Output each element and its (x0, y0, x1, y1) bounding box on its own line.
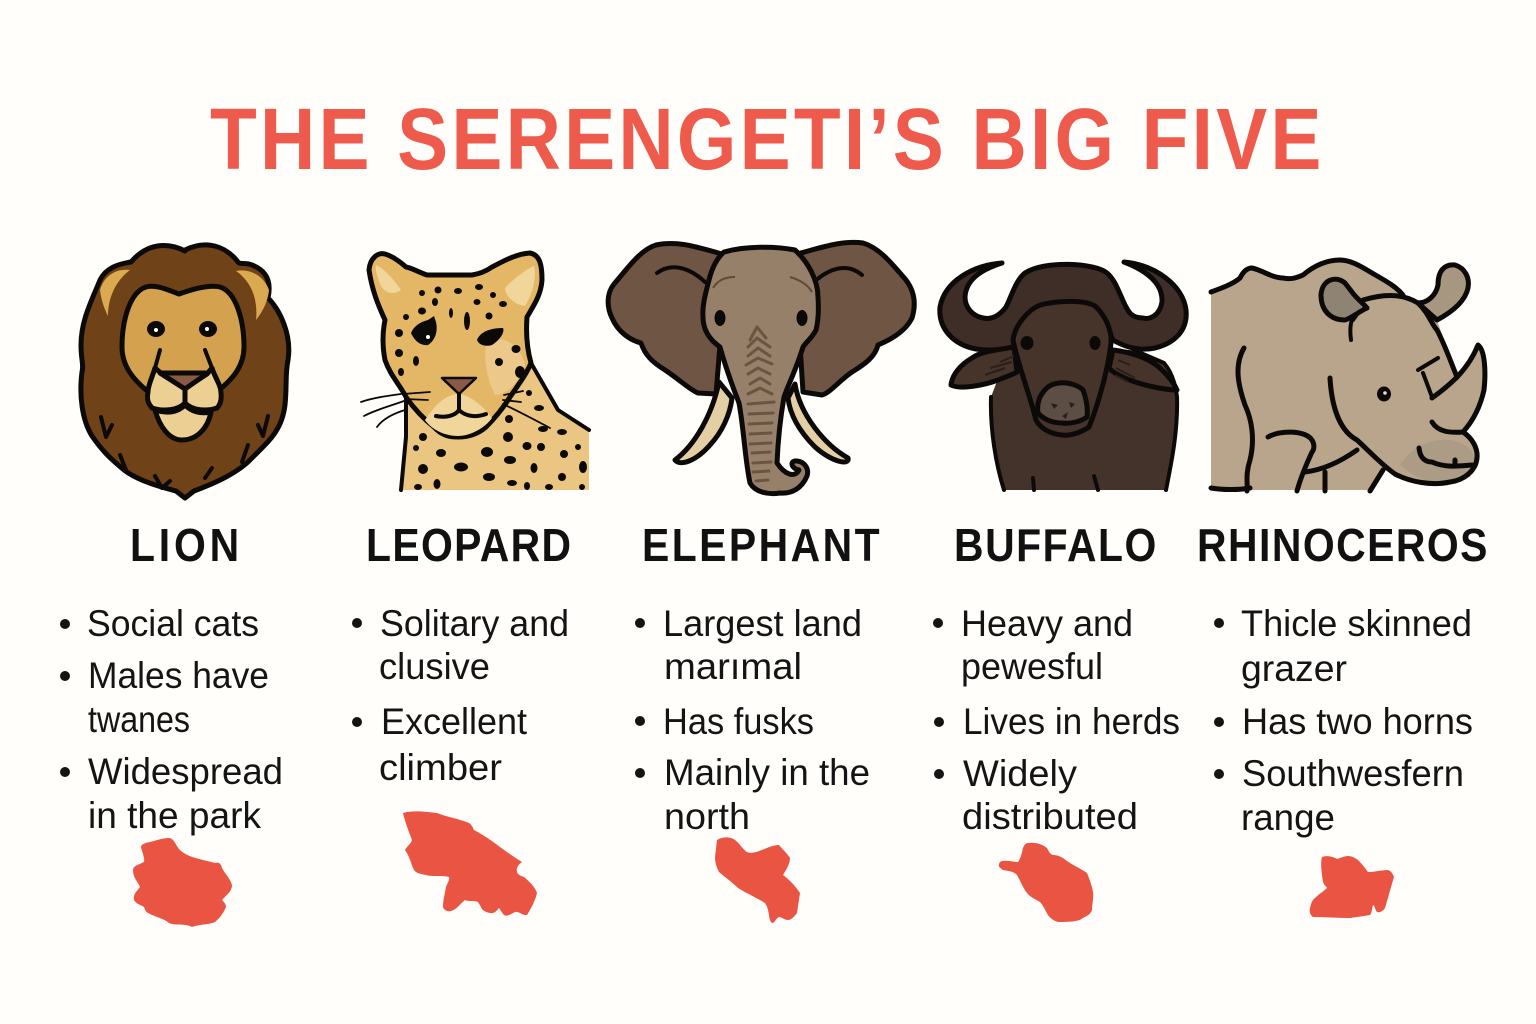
facts: leopard: Excellent (381, 701, 528, 742)
range map: rhinoceros (1310, 856, 1394, 918)
title: THE SERENGETI’S BIG FIVE (210, 91, 1321, 188)
facts: leopard: climber (379, 747, 502, 788)
facts: lion: twanes (88, 699, 190, 740)
facts: lion (60, 603, 283, 836)
facts: elephant: Largest land (663, 603, 862, 644)
icon: rhinoceros (1211, 260, 1485, 491)
facts: lion: Males have (88, 655, 269, 696)
facts: rhinoceros: Thicle skinned (1241, 603, 1472, 644)
heading: buffalo: BUFFALO (954, 520, 1156, 572)
range map: leopard (403, 811, 537, 916)
facts: elephant: north (664, 796, 750, 837)
facts: elephant: Mainly in the (664, 752, 870, 793)
facts: rhinoceros: Southwesfern (1242, 753, 1464, 794)
panel: buffalo (933, 262, 1186, 922)
facts: lion: Social cats (87, 603, 259, 644)
icon: buffalo (940, 262, 1186, 490)
facts: buffalo (933, 603, 1180, 837)
facts: buffalo: pewesful (961, 646, 1103, 687)
range map: elephant (715, 837, 800, 923)
panel: rhinoceros (1197, 260, 1487, 918)
facts: buffalo: Heavy and (961, 603, 1133, 644)
panel: lion (60, 245, 289, 927)
panel: leopard (352, 253, 589, 916)
facts: rhinoceros: grazer (1241, 648, 1347, 689)
facts: buffalo: distributed (962, 796, 1138, 837)
facts: rhinoceros: Has two horns (1242, 701, 1473, 742)
facts: leopard: Solitary and (380, 603, 569, 644)
icon: lion head (81, 245, 289, 498)
facts: elephant: Has fusks (663, 701, 814, 742)
heading: elephant: ELEPHANT (642, 520, 880, 572)
facts: buffalo: Lives in herds (963, 701, 1180, 742)
facts: elephant (635, 603, 870, 837)
range map: lion (133, 838, 232, 927)
facts: rhinoceros (1214, 603, 1473, 838)
facts: elephant: marımal (664, 646, 802, 687)
facts: lion: in the park (88, 795, 261, 836)
icon: elephant head (608, 242, 914, 494)
heading: lion: LION (130, 520, 239, 572)
facts: leopard: clusive (379, 646, 490, 687)
heading: leopard: LEOPARD (366, 520, 571, 572)
icon: leopard (361, 253, 589, 490)
facts: lion: Widespread (88, 751, 283, 792)
range map: buffalo (999, 843, 1093, 922)
facts: buffalo: Widely (963, 753, 1077, 794)
panel: elephant (608, 242, 914, 923)
facts: leopard (352, 603, 569, 788)
facts: rhinoceros: range (1241, 797, 1335, 838)
heading: rhinoceros: RHINOCEROS (1197, 520, 1487, 572)
